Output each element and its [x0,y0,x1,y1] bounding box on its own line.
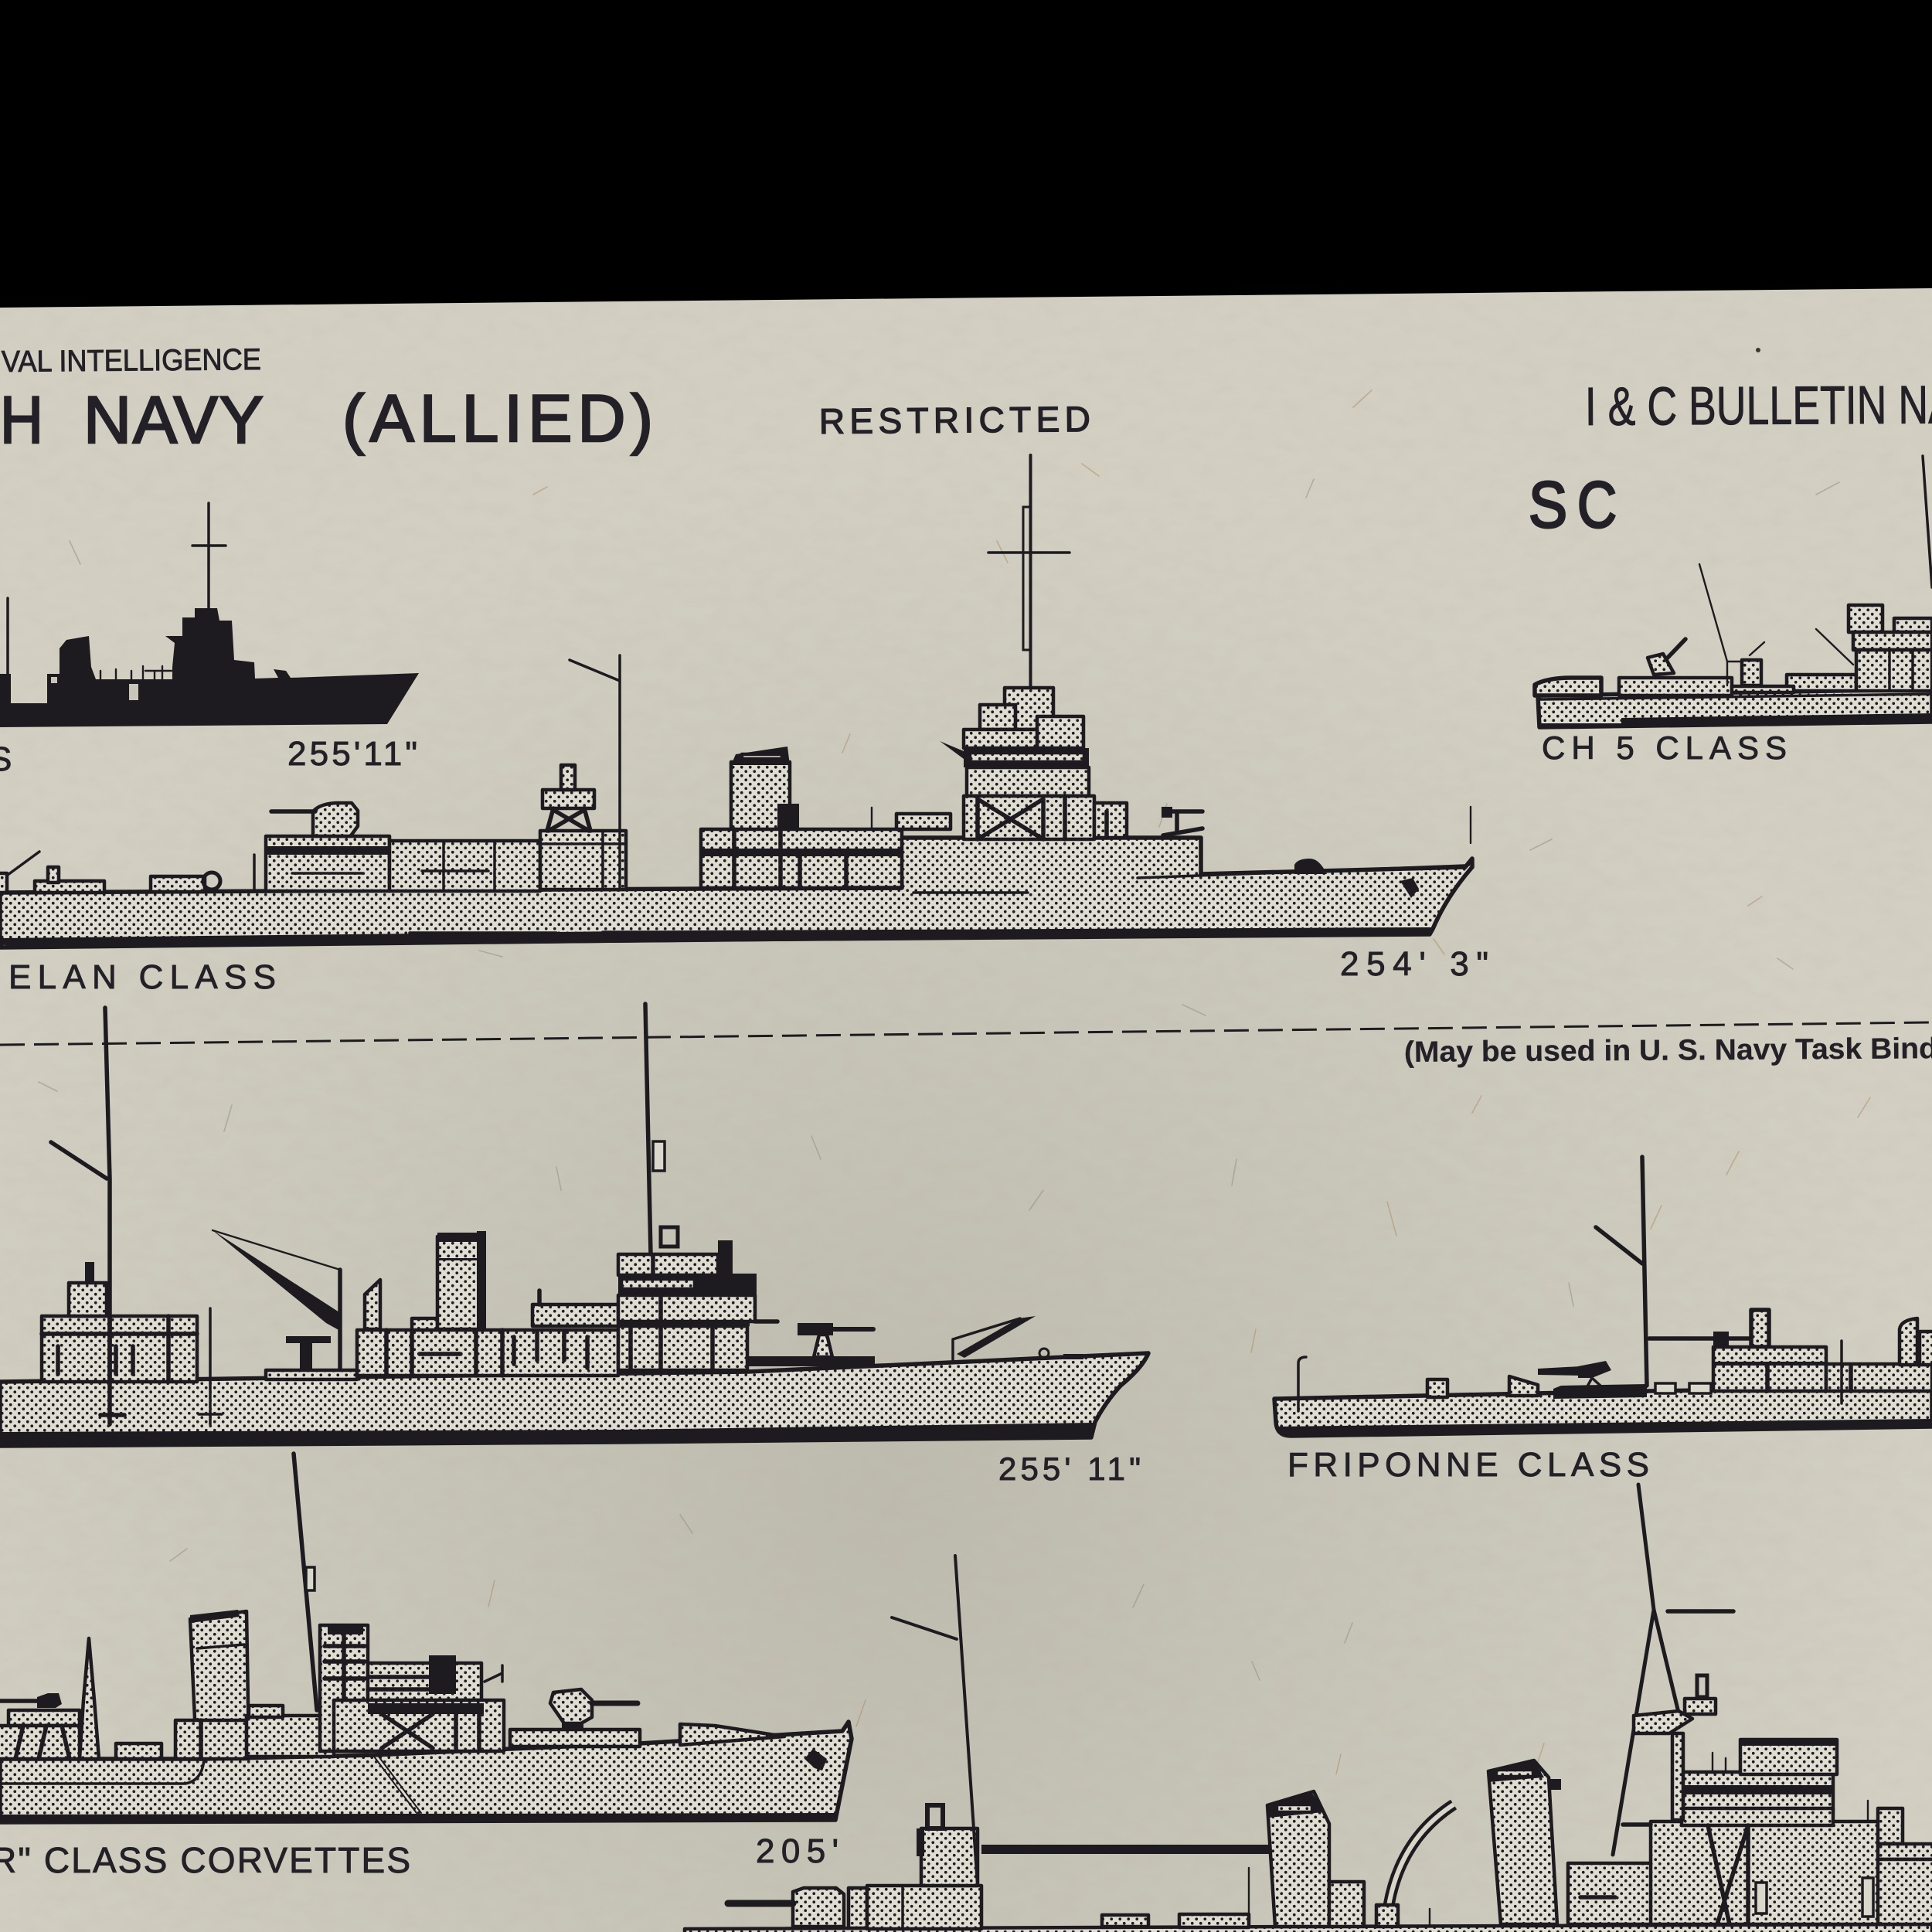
midship box [1742,660,1761,685]
dashed divider [0,1022,1932,1045]
hull openings [129,684,138,700]
after mast [51,1008,124,1424]
small funnel [1751,1310,1769,1347]
section heading SC: S [1529,468,1567,541]
forward crane [953,1316,1036,1360]
tall mast at edge [1923,456,1932,587]
black background above the sheet [0,0,1932,308]
header: office of naval intelligence: VAL INTELLIGENCE [2,343,261,379]
hull [0,838,1472,947]
mast and rigging [1699,564,1853,685]
aft gun [728,1888,867,1928]
class label: Elan: ELAN CLASS [9,958,276,996]
anchor [1400,878,1419,898]
length label: sloop: 255' 11" [998,1451,1141,1487]
funnel [731,747,799,832]
deck rigging [100,666,172,679]
length label: Elan: 254' 3" [1340,945,1488,983]
anchor [804,1749,827,1770]
forward gun [550,1689,638,1730]
funnel [190,1610,249,1751]
foremast [192,503,226,608]
binder note: (May be used in U. S. Navy Task Bind [1404,1032,1932,1069]
main mast [645,1004,678,1254]
title: French navy allied: H [0,383,43,457]
hull [0,1353,1148,1446]
stern staff [1298,1357,1306,1411]
ensign staff [199,1308,222,1424]
torpedo boom [981,1845,1292,1854]
class label: corvettes: R" CLASS CORVETTES [0,1840,410,1880]
funnel [437,1231,486,1329]
tripod mast [1613,1485,1733,1855]
aft gun platform [0,1693,80,1759]
aft gun turret [271,803,358,836]
ship: Friponne class [1274,1157,1932,1437]
title: French navy allied: (ALLIED) [342,382,653,456]
after mast [892,1556,978,1886]
mast [1596,1157,1647,1386]
aft deck fittings [0,852,254,893]
hull [1274,1387,1932,1436]
title: French navy allied [0,382,653,457]
forward deckhouse [510,1730,640,1747]
ship: 255 ft 11 in sloop [0,1004,1148,1447]
deck blocks [1427,1376,1711,1397]
aft deckhouse [42,1262,197,1382]
ship: black silhouette [0,503,419,727]
small house [116,1743,162,1759]
class label: CH 5: CH 5 CLASS [1542,730,1787,766]
forward superstructure [1568,1740,1932,1924]
sheer lines [410,866,1465,933]
hull [1538,689,1932,727]
tripod platform [1634,1675,1716,1733]
boot topping [0,1813,836,1823]
small deck fittings [1102,1868,1430,1927]
section heading SC: C [1577,468,1617,541]
length label: corvettes: 205' [756,1832,838,1870]
ship: bottom large destroyer [685,1485,1932,1932]
forecastle gun [1162,807,1202,835]
forecastle wedge [680,1724,784,1745]
bridge [320,1625,504,1751]
hull [0,1722,852,1822]
deck strip [685,1924,1932,1932]
crane [213,1230,357,1379]
boom [1649,1332,1751,1345]
bow fittings [1039,1349,1083,1359]
gun [1538,1361,1647,1399]
bridge tower [940,688,1127,839]
aft superstructure [867,1805,981,1929]
mast [294,1454,317,1710]
aft deckhouses [266,831,626,891]
bridge [618,1240,777,1370]
silhouette hull and superstructure [0,608,419,727]
midship deckhouse [357,1318,618,1376]
midship blocks [175,1706,334,1759]
after funnel [1267,1791,1364,1927]
keel band [1276,1419,1932,1437]
deckhouse [1713,1341,1932,1403]
gun deckhouse [1619,678,1732,696]
ventilators [1900,1318,1932,1365]
length label: silhouette: 255'11" [287,735,417,773]
after bridge deck [532,1291,618,1326]
ship: corvette [0,1454,852,1823]
keel band [0,927,1430,948]
stern house [1535,678,1601,696]
low house [1787,675,1856,691]
curved ventilator [1376,1804,1454,1927]
ventilator [365,1280,380,1329]
forecastle turret [1294,859,1327,874]
director tower [543,765,594,831]
forward gun [747,1323,875,1366]
class label: Friponne: FRIPONNE CLASS [1287,1446,1649,1484]
hull plating [0,1757,421,1813]
paper speck [1756,348,1760,352]
restricted marking: RESTRICTED [819,399,1090,441]
ship: Elan class [0,455,1472,948]
jackstaff [1470,807,1471,843]
main mast with yard [988,455,1070,688]
after mast with gaff [570,655,620,888]
title: French navy allied: NAVY [83,383,264,457]
midships deckhouse [701,808,951,888]
angled gun [1648,639,1685,675]
boot topping [0,1423,1095,1447]
spire mast [80,1638,99,1759]
forward funnel [1488,1760,1561,1924]
bridge [1849,605,1932,691]
section heading SC [1529,468,1617,541]
ship: CH 5 class [1535,456,1932,728]
